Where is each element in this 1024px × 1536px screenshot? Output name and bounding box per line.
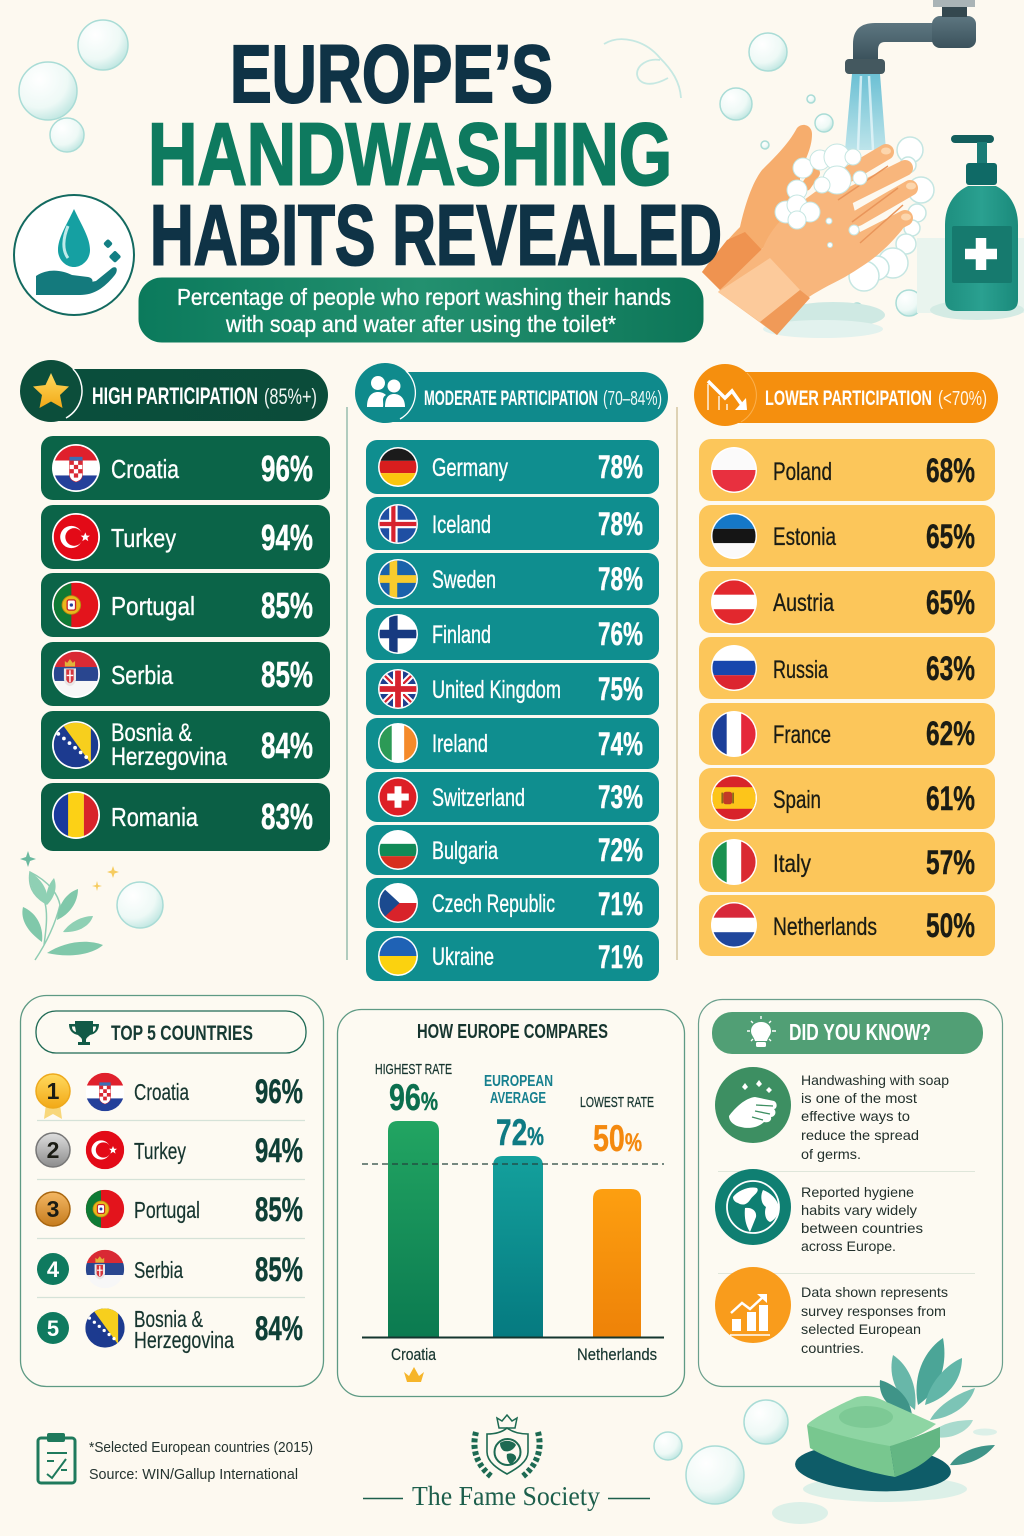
column divider right (676, 407, 678, 960)
label: Netherlands: Netherlands (577, 1345, 657, 1364)
row: Bosnia and Herzegovina: Herzegovina (111, 743, 227, 771)
row: rank 5 Bosnia and Herzegovina: Herzegovina (134, 1327, 234, 1353)
title: HABITS REVEALED (150, 188, 722, 284)
row: France: France (773, 721, 831, 749)
badge: rank 4: 4 (47, 1257, 60, 1282)
fact 3 (715, 1267, 948, 1356)
panel: lower participation rows (699, 439, 995, 956)
heading: top 5 countries (36, 1011, 306, 1053)
flag: United Kingdom (378, 669, 418, 709)
row: Spain (699, 768, 995, 829)
flag: Germany (378, 447, 418, 487)
row: Portugal: 85% (261, 585, 313, 626)
footnote and source (89, 1439, 313, 1483)
fact 3 text: Data shown represents (801, 1284, 948, 1300)
row: Iceland (366, 497, 659, 550)
row: Italy: Italy (773, 850, 811, 878)
row: Russia (699, 637, 995, 699)
row: Spain: Spain (773, 786, 821, 814)
row: Ukraine: Ukraine (432, 943, 494, 971)
row: Estonia (699, 505, 995, 567)
row: Russia: Russia (773, 656, 828, 684)
row: Russia: 63% (926, 650, 975, 688)
row: Bulgaria: 72% (598, 832, 643, 868)
flag: Bosnia and Herzegovina (52, 721, 100, 769)
row: Serbia (41, 642, 330, 706)
medal: rank 3: 3 (47, 1196, 59, 1222)
footnote and source: *Selected European countries (2015) (89, 1439, 313, 1456)
row: rank 4 Serbia: 85% (255, 1251, 303, 1289)
label: European average (484, 1073, 553, 1153)
flag: Bulgaria (378, 830, 418, 870)
row: Bosnia and Herzegovina: Bosnia & (111, 719, 192, 747)
row: Ireland: Ireland (432, 730, 488, 758)
row: Poland (699, 439, 995, 501)
label: European average: AVERAGE (490, 1090, 546, 1107)
flag: Serbia (52, 650, 100, 698)
flag: Iceland (378, 504, 418, 544)
flag: Croatia (86, 1073, 124, 1111)
flag: Romania (52, 791, 100, 839)
bar: European average 72% (493, 1156, 543, 1337)
row: rank 1 Croatia: 96% (255, 1073, 303, 1111)
fact 1 text: effective ways to (801, 1108, 910, 1124)
row: France: 62% (926, 715, 975, 753)
row: Bosnia and Herzegovina (41, 711, 330, 779)
flag: Croatia (52, 444, 100, 492)
fact 3 text: selected European (801, 1321, 921, 1337)
column header: lower participation (694, 364, 998, 426)
row: Switzerland (366, 772, 659, 822)
decorative bubbles top left (19, 20, 128, 152)
row: Netherlands (699, 895, 995, 956)
row: Croatia (41, 436, 330, 500)
row: Finland (366, 608, 659, 660)
row: Italy: 57% (926, 844, 975, 882)
column header: lower participation: (<70%) (938, 388, 987, 410)
illustration: soapy hands (702, 125, 934, 338)
logo: The Fame Society (363, 1415, 650, 1511)
row: Romania: 83% (261, 796, 313, 837)
row: Germany: 78% (598, 449, 643, 485)
row: rank 1 Croatia (36, 1073, 303, 1119)
row: rank 2 Turkey: 94% (255, 1132, 303, 1170)
illustration: soap dispenser (917, 135, 1024, 320)
decorative leaves and bubble (20, 851, 163, 960)
footnote and source: Source: WIN/Gallup International (89, 1466, 298, 1483)
row: Sweden (366, 553, 659, 605)
row: rank 3 Portugal: 85% (255, 1191, 303, 1229)
fact 2 (715, 1169, 923, 1254)
row: France (699, 703, 995, 765)
icon: globe (715, 1169, 791, 1245)
fact 2 text: across Europe. (801, 1238, 896, 1254)
column header: high participation (20, 360, 328, 422)
row: Germany: Germany (432, 454, 508, 482)
row: Sweden: Sweden (432, 566, 496, 594)
illustration: faucet and water (845, 0, 976, 150)
flag: Sweden (378, 559, 418, 599)
row: Romania (41, 783, 330, 851)
row: Turkey: 94% (261, 517, 313, 558)
title: HANDWASHING (148, 104, 672, 204)
flag: Czech Republic (378, 883, 418, 923)
label: highest rate: 96% (389, 1077, 438, 1118)
medal: rank 2 (36, 1133, 70, 1167)
medal: rank 2: 2 (47, 1137, 59, 1163)
fact 1 text: reduce the spread (801, 1127, 919, 1143)
label: lowest rate: LOWEST RATE (580, 1094, 654, 1111)
row: Czech Republic (366, 878, 659, 928)
row: Sweden: 78% (598, 561, 643, 597)
column header: moderate participation: MODERATE PARTICIPATION (424, 387, 598, 410)
fact 1 text (801, 1072, 949, 1162)
row: Czech Republic: 71% (598, 886, 643, 922)
flag: Portugal (52, 581, 100, 629)
decorative bubbles bottom (654, 1400, 788, 1504)
row: United Kingdom (366, 663, 659, 715)
flag: Russia (711, 645, 757, 691)
panel: did you know (698, 1000, 1002, 1386)
row: Portugal (41, 573, 330, 637)
column header: high participation: (85%+) (264, 384, 317, 409)
row: Bulgaria: Bulgaria (432, 837, 498, 865)
row: Estonia: 65% (926, 518, 975, 556)
column divider left (346, 407, 348, 960)
flag: Spain (711, 775, 757, 821)
title: EUROPE’S (230, 29, 553, 120)
icon: crown (404, 1367, 424, 1382)
row: Czech Republic: Czech Republic (432, 890, 555, 918)
row: Switzerland: 73% (598, 779, 643, 815)
fact 2 text: habits vary widely (801, 1202, 917, 1218)
row: rank 5 Bosnia and Herzegovina (37, 1306, 303, 1353)
flag: France (711, 711, 757, 757)
decorative swirl (604, 39, 681, 98)
label: Croatia: Croatia (391, 1345, 436, 1364)
flag: Estonia (711, 513, 757, 559)
fact 1 (715, 1067, 949, 1162)
row: Bulgaria (366, 825, 659, 875)
row: Portugal: Portugal (111, 591, 195, 621)
fact 2 text (801, 1184, 923, 1254)
heading: top 5 countries: TOP 5 COUNTRIES (111, 1022, 253, 1045)
row: Netherlands: 50% (926, 907, 975, 945)
panel: high participation rows (41, 436, 330, 851)
row: Ukraine (366, 931, 659, 981)
icon: people (367, 376, 405, 407)
fact 3 text: countries. (801, 1340, 864, 1356)
subtitle banner: Percentage of people who report washing their hands (177, 284, 671, 310)
label: lowest rate: 50% (593, 1118, 642, 1159)
row: Germany (366, 440, 659, 494)
flag: Bosnia and Herzegovina (85, 1308, 125, 1348)
row: Poland: 68% (926, 452, 975, 490)
row: rank 4 Serbia: Serbia (134, 1257, 184, 1283)
label: lowest rate (580, 1094, 654, 1159)
row: Ireland (366, 718, 659, 769)
row: Iceland: Iceland (432, 511, 491, 539)
heading: did you know: DID YOU KNOW? (789, 1019, 931, 1045)
flag: Ukraine (378, 936, 418, 976)
row: rank 1 Croatia: Croatia (134, 1079, 190, 1105)
fact 1 text: Handwashing with soap (801, 1072, 949, 1088)
icon: rising chart (715, 1267, 791, 1343)
row: Finland: Finland (432, 621, 491, 649)
row: Spain: 61% (926, 780, 975, 818)
row: rank 5 Bosnia and Herzegovina: Bosnia & (134, 1306, 203, 1332)
flag: Turkey (52, 513, 100, 561)
icon: clipboard checklist (38, 1433, 75, 1483)
row: rank 2 Turkey: Turkey (134, 1138, 186, 1164)
flag: Turkey (86, 1131, 124, 1169)
flag: Switzerland (378, 777, 418, 817)
flag: Netherlands (711, 902, 757, 948)
fact 1 text: is one of the most (801, 1090, 917, 1106)
row: Austria: Austria (773, 589, 834, 617)
fact 2 text: between countries (801, 1220, 923, 1236)
row: United Kingdom: United Kingdom (432, 676, 561, 704)
icon: washing hands (715, 1067, 791, 1143)
fact 2 text: Reported hygiene (801, 1184, 914, 1200)
medal: rank 1: 1 (47, 1078, 60, 1104)
medal: rank 1 (36, 1074, 70, 1119)
row: Switzerland: Switzerland (432, 784, 525, 812)
column header: moderate participation: (70–84%) (603, 388, 662, 410)
flag: Portugal (86, 1190, 124, 1228)
column header: moderate participation (355, 363, 668, 423)
icon: light bulb (747, 1016, 776, 1047)
panel: top 5 countries (20, 996, 324, 1386)
row: rank 4 Serbia (37, 1250, 303, 1289)
bar: Croatia 96% (388, 1121, 439, 1337)
column header: lower participation: LOWER PARTICIPATION (765, 387, 932, 410)
logo: The Fame Society: The Fame Society (412, 1481, 600, 1511)
badge: rank 4 (37, 1253, 69, 1285)
row: rank 3 Portugal: Portugal (134, 1197, 200, 1223)
flag: Austria (711, 579, 757, 625)
icon: trophy (69, 1021, 99, 1045)
panel: moderate participation rows (366, 440, 659, 981)
title (148, 29, 722, 284)
row: Netherlands: Netherlands (773, 913, 877, 941)
row: Turkey (41, 505, 330, 569)
row: Austria: 65% (926, 584, 975, 622)
row: United Kingdom: 75% (598, 671, 643, 707)
heading: how Europe compares: HOW EUROPE COMPARES (417, 1021, 608, 1043)
flag: Serbia (86, 1250, 124, 1288)
flag: Finland (378, 614, 418, 654)
row: Italy (699, 832, 995, 892)
row: Serbia: Serbia (111, 660, 173, 690)
subtitle banner: with soap and water after using the toilet* (225, 311, 616, 337)
fact 3 text (801, 1284, 948, 1356)
row: Croatia: Croatia (111, 454, 179, 484)
row: Ireland: 74% (598, 726, 643, 762)
bar: Netherlands 50% (593, 1189, 641, 1337)
row: rank 5 Bosnia and Herzegovina: 84% (255, 1310, 303, 1348)
icon: star (33, 373, 69, 408)
badge: rank 5: 5 (47, 1316, 59, 1341)
medal: rank 3 (36, 1192, 70, 1226)
row: rank 2 Turkey (36, 1131, 303, 1170)
row: Romania: Romania (111, 802, 198, 832)
icon: falling trend (708, 381, 747, 410)
fact 3 text: survey responses from (801, 1303, 946, 1319)
row: Poland: Poland (773, 458, 832, 486)
illustration: soap on dish with leaves (772, 1338, 997, 1524)
crest (474, 1415, 540, 1477)
row: Iceland: 78% (598, 506, 643, 542)
icon: water drop over hand (14, 195, 134, 315)
row: Bosnia and Herzegovina: 84% (261, 725, 313, 766)
row: Serbia: 85% (261, 654, 313, 695)
row: Estonia: Estonia (773, 523, 836, 551)
bar chart (362, 1121, 664, 1338)
badge: rank 5 (37, 1312, 69, 1344)
label: highest rate (375, 1061, 452, 1118)
subtitle banner (138, 277, 704, 343)
row: Finland: 76% (598, 616, 643, 652)
row: Turkey: Turkey (111, 523, 176, 553)
fact 1 text: of germs. (801, 1146, 861, 1162)
row: Croatia: 96% (261, 448, 313, 489)
flag: Ireland (378, 723, 418, 763)
row: Austria (699, 571, 995, 633)
label: highest rate: HIGHEST RATE (375, 1061, 452, 1078)
decorative bubbles near faucet (720, 33, 922, 316)
flag: Poland (711, 447, 757, 493)
row: rank 3 Portugal (36, 1190, 303, 1229)
heading: did you know (712, 1012, 983, 1054)
panel: how Europe compares (338, 1010, 684, 1396)
label: European average: 72% (496, 1112, 544, 1153)
flag: Italy (711, 839, 757, 885)
row: Ukraine: 71% (598, 939, 643, 975)
column header: high participation: HIGH PARTICIPATION (92, 383, 258, 410)
label: European average: EUROPEAN (484, 1073, 553, 1090)
